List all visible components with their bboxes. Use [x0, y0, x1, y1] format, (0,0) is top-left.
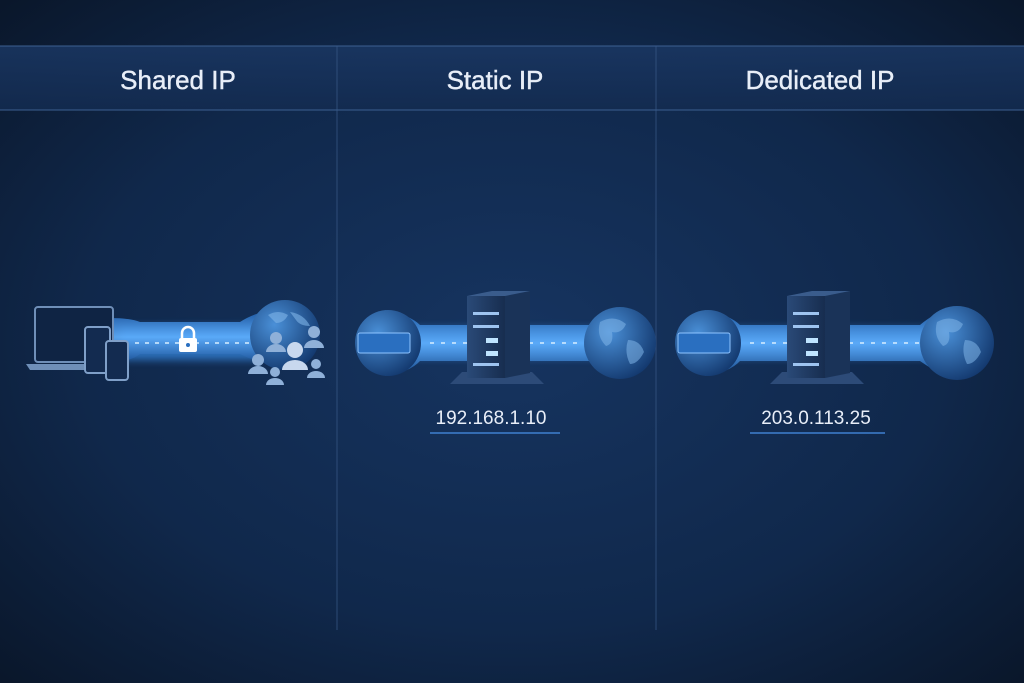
icon: globe right	[584, 307, 656, 379]
heading: Shared IP: Shared IP	[120, 65, 236, 95]
panel: dedicated IP diagram	[675, 291, 994, 433]
text: static IP address: 192.168.1.10	[436, 408, 546, 429]
panel: static IP diagram	[355, 291, 656, 433]
heading: Dedicated IP: Dedicated IP	[746, 65, 894, 95]
panel: shared IP diagram	[26, 300, 325, 385]
icon: phone	[106, 341, 128, 380]
icon: server	[770, 291, 864, 384]
icon: globe right	[920, 306, 994, 380]
icon: globe left	[675, 310, 741, 376]
icon: globe	[250, 300, 320, 370]
header band	[0, 46, 1024, 110]
icon: lock	[179, 327, 197, 352]
heading: Static IP: Static IP	[447, 65, 543, 95]
icon: tablet	[85, 327, 110, 373]
icon: people	[248, 326, 325, 385]
icon: globe left	[355, 310, 421, 376]
icon: server	[450, 291, 544, 384]
text: dedicated IP address: 203.0.113.25	[761, 408, 871, 429]
icon: laptop	[26, 307, 122, 370]
